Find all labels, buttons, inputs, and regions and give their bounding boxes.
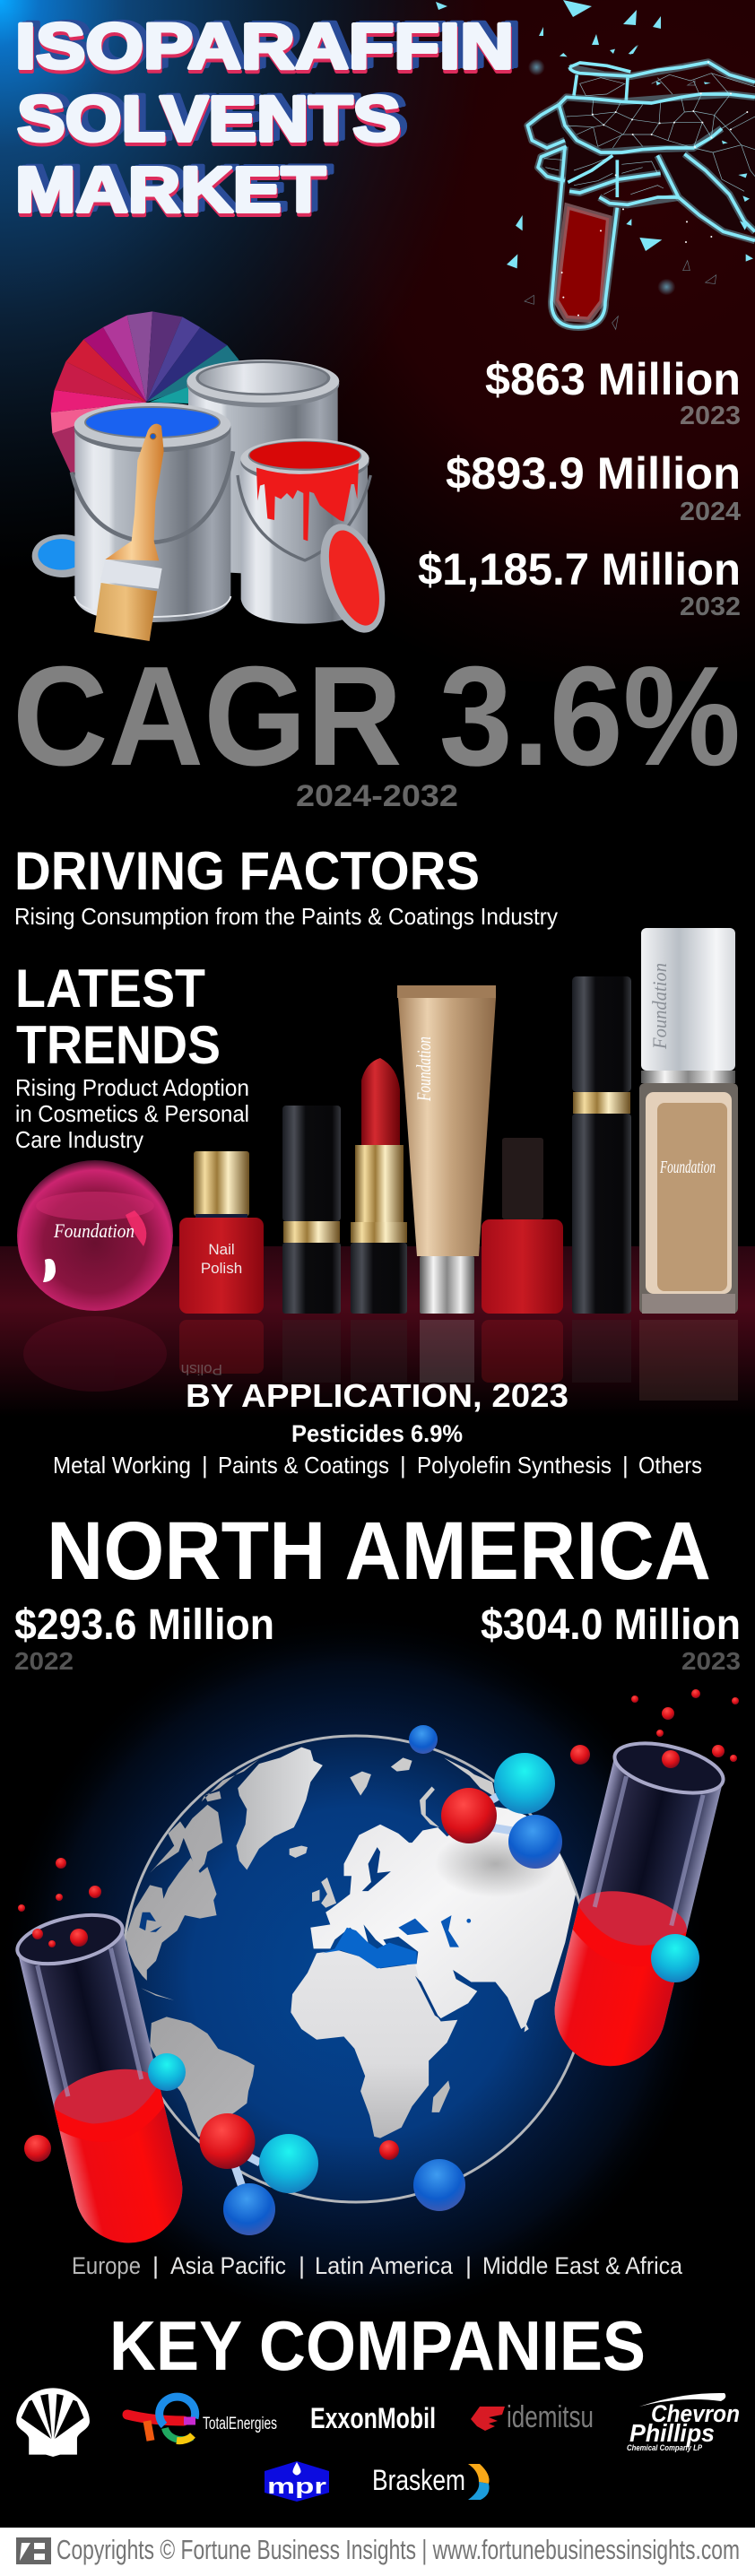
application segments: |: [400, 1452, 406, 1479]
lower molecule: [199, 2113, 318, 2235]
foundation bottle: Foundation: [659, 1158, 716, 1177]
driving factors: [14, 841, 558, 930]
application segments: Polyolefin Synthesis: [417, 1452, 612, 1479]
foundation tube: Foundation: [412, 1036, 435, 1102]
driving factors: Rising Consumption from the Paints & Coatings Industry: [14, 903, 558, 930]
latest trends: LATEST: [15, 958, 205, 1019]
blue paint can: [72, 403, 233, 622]
title: MARKET: [19, 154, 329, 225]
application segments: |: [202, 1452, 208, 1479]
left test tube: [13, 1906, 193, 2254]
stat: 1185.7 million 2032: [418, 544, 741, 621]
black mascara: [572, 976, 631, 1314]
north america heading: NORTH AMERICA: [47, 1505, 711, 1597]
key companies heading: KEY COMPANIES: [109, 2306, 646, 2385]
driving factors: DRIVING FACTORS: [14, 841, 480, 901]
title: ISOPARAFFIN: [19, 11, 517, 82]
brush: [94, 424, 164, 641]
stat: north america 2022: [14, 1601, 274, 1675]
right test tube: [543, 1734, 728, 2077]
application segments: Metal Working: [53, 1452, 191, 1479]
foundation bottle: [639, 928, 738, 1314]
logo: Chevron Phillips: Chevron: [651, 2400, 740, 2427]
stat: north america 2022: 2022: [14, 1647, 74, 1675]
stat: north america 2023: $304.0 Million: [481, 1601, 741, 1649]
globe: [123, 1736, 589, 2202]
red floor and reflections: Polish: [181, 1361, 222, 1378]
blue lid on floor: [32, 534, 93, 577]
stat: north america 2023: 2023: [681, 1647, 741, 1675]
logo: MPR: [265, 2461, 329, 2502]
title: SOLVENTS: [18, 88, 402, 159]
nail polish with gold cap: Polish: [201, 1260, 242, 1277]
red lipstick: [351, 1058, 407, 1314]
latest trends: TRENDS: [16, 1015, 221, 1075]
title: MARKET: [15, 155, 325, 226]
other regions: Europe: [72, 2252, 141, 2279]
footer logo: [16, 2537, 51, 2564]
latest trends: in Cosmetics & Personal: [15, 1100, 249, 1127]
logo: TotalEnergies: TotalEnergies: [203, 2415, 277, 2433]
other regions: Latin America: [315, 2252, 454, 2279]
logo: MPR: mpr: [267, 2475, 326, 2499]
CAGR figure: 2024-2032: [296, 779, 458, 813]
logo: Chevron Phillips: [627, 2393, 740, 2452]
latest trends: Care Industry: [15, 1126, 143, 1153]
title: MARKET: [16, 159, 326, 230]
stat: 893.9 million 2024: $893.9 Million: [446, 448, 741, 499]
stat: north america 2023: [481, 1601, 741, 1675]
title: SOLVENTS: [24, 82, 408, 153]
illustration: globe with test tubes and molecules: [13, 1689, 739, 2254]
stat: 863 million 2023: 2023: [680, 402, 741, 430]
title: ISOPARAFFIN: [16, 15, 515, 86]
title: SOLVENTS: [17, 84, 401, 155]
foundation tube: [397, 985, 496, 1314]
stat: 863 million 2023: $863 Million: [485, 354, 741, 404]
pink compact: Foundation: [53, 1219, 135, 1242]
other regions: |: [152, 2252, 159, 2279]
logo: TotalEnergies: [127, 2397, 277, 2441]
logo: idemitsu: idemitsu: [507, 2400, 594, 2434]
title: MARKET: [22, 153, 333, 224]
by application heading: [186, 1377, 568, 1447]
latest trends: [15, 958, 249, 1153]
title: ISOPARAFFIN: [15, 12, 514, 82]
illustration: wireframe hand holding test tube: [436, 0, 755, 329]
stat: 893.9 million 2024: [446, 448, 741, 526]
logo: ExxonMobil: ExxonMobil: [310, 2402, 436, 2434]
application segments: Paints & Coatings: [218, 1452, 389, 1479]
back silver can: [187, 360, 339, 574]
stat: 863 million 2023: [485, 354, 741, 430]
logo: Chevron Phillips: Chemical Company LP: [627, 2443, 703, 2452]
title: [15, 10, 521, 230]
nail polish with gold cap: Nail: [208, 1241, 235, 1258]
foundation bottle: Foundation: [648, 963, 671, 1050]
application segments: Others: [638, 1452, 702, 1479]
illustration: paint cans and brush: [32, 311, 397, 641]
nail polish with dark cap: [482, 1138, 563, 1314]
colour fan: [51, 311, 239, 475]
footer bar: [0, 2528, 755, 2576]
by application heading: Pesticides 6.9%: [291, 1420, 463, 1447]
logo: Chevron Phillips: Phillips: [629, 2419, 715, 2447]
title: SOLVENTS: [21, 83, 404, 154]
other regions: |: [299, 2252, 305, 2279]
logo: idemitsu: [471, 2400, 594, 2434]
pink compact: [17, 1160, 173, 1311]
stat: 1185.7 million 2032: $1,185.7 Million: [418, 544, 741, 594]
red paint can: [238, 438, 370, 624]
by application heading: BY APPLICATION, 2023: [186, 1377, 568, 1414]
stat: 893.9 million 2024: 2024: [680, 498, 741, 526]
nail polish with gold cap: [179, 1151, 264, 1314]
stat: north america 2022: $293.6 Million: [14, 1601, 274, 1649]
other regions: Asia Pacific: [170, 2252, 286, 2279]
stat: 1185.7 million 2032: 2032: [680, 593, 741, 621]
logo: Shell: [16, 2388, 90, 2457]
black lipstick: [282, 1106, 341, 1314]
other regions: Middle East & Africa: [482, 2252, 683, 2279]
red floor and reflections: [0, 1246, 755, 1417]
floating spheres: [18, 1689, 739, 2211]
other regions: [72, 2252, 683, 2279]
company logos: [16, 2388, 740, 2502]
other regions: |: [465, 2252, 472, 2279]
application segments: |: [622, 1452, 629, 1479]
latest trends: Rising Product Adoption: [15, 1074, 249, 1101]
title: ISOPARAFFIN: [22, 10, 521, 81]
red lid leaning: [308, 516, 397, 640]
application segments: [53, 1452, 702, 1479]
upper molecule: [441, 1753, 562, 1869]
logo: Braskem: Braskem: [372, 2464, 465, 2496]
illustration: cosmetics products: [0, 928, 755, 1417]
